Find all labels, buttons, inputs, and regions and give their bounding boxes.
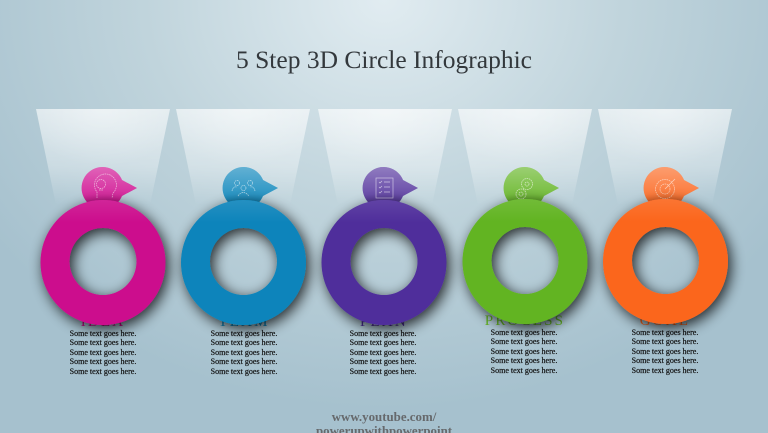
light beam 4 [458,109,592,205]
label: plan: PLAN [360,314,408,330]
step 1: idea [40,167,165,376]
text block: team: Some text goes here. [211,367,277,376]
footer url: www.youtube.com/ [332,410,437,424]
text block: goal: Some text goes here. [632,337,698,346]
icon: target [656,179,675,198]
text block: team: Some text goes here. [211,357,277,366]
step 5: goal [603,167,728,375]
label: team: TEAM [218,314,270,330]
icon: checklist [376,178,393,198]
ring: goal [603,199,728,324]
speech bubble: process [504,167,559,209]
text block: goal: Some text goes here. [632,328,698,337]
text block: team: Some text goes here. [211,338,277,347]
text block: process [491,328,557,375]
text block: idea: Some text goes here. [70,338,136,347]
step 2: team [181,167,306,376]
text block: team: Some text goes here. [211,329,277,338]
text block: plan: Some text goes here. [350,338,416,347]
speech bubble: idea [82,167,137,209]
light beam 3 [318,109,452,205]
speech bubble: team [223,167,278,209]
text block: plan: Some text goes here. [350,357,416,366]
text block: goal: Some text goes here. [632,347,698,356]
text block: process: Some text goes here. [491,347,557,356]
icon: head with light bulb [94,174,116,198]
label: process: PROCESS [485,313,565,329]
light beam 1 [36,109,170,205]
title: 5 Step 3D Circle Infographic [236,45,532,74]
text block: idea [70,329,136,376]
text block: idea: Some text goes here. [70,329,136,338]
icon: people [232,180,255,196]
text block: idea: Some text goes here. [70,357,136,366]
label: goal: GOAL [640,313,690,329]
text block: goal: Some text goes here. [632,356,698,365]
text block: plan: Some text goes here. [350,367,416,376]
ring: team [181,200,306,325]
light beam 5 [598,109,732,205]
text block: team [211,329,277,376]
light beam 2 [176,109,310,205]
text block: plan [350,329,416,376]
speech bubble: goal [644,167,699,209]
text block: goal [632,328,698,375]
speech bubble: plan [363,167,418,209]
text block: process: Some text goes here. [491,356,557,365]
text block: idea: Some text goes here. [70,367,136,376]
text block: idea: Some text goes here. [70,348,136,357]
icon: gears [516,178,532,199]
text block: goal: Some text goes here. [632,366,698,375]
ring: idea [40,200,165,325]
text block: process: Some text goes here. [491,337,557,346]
text block: process: Some text goes here. [491,366,557,375]
step 3: plan [321,167,446,376]
text block: plan: Some text goes here. [350,348,416,357]
text block: plan: Some text goes here. [350,329,416,338]
label: idea: IDEA [81,314,125,330]
ring: plan [321,200,446,325]
step 4: process [462,167,587,375]
text block: team: Some text goes here. [211,348,277,357]
ring: process [462,199,587,324]
text block: process: Some text goes here. [491,328,557,337]
